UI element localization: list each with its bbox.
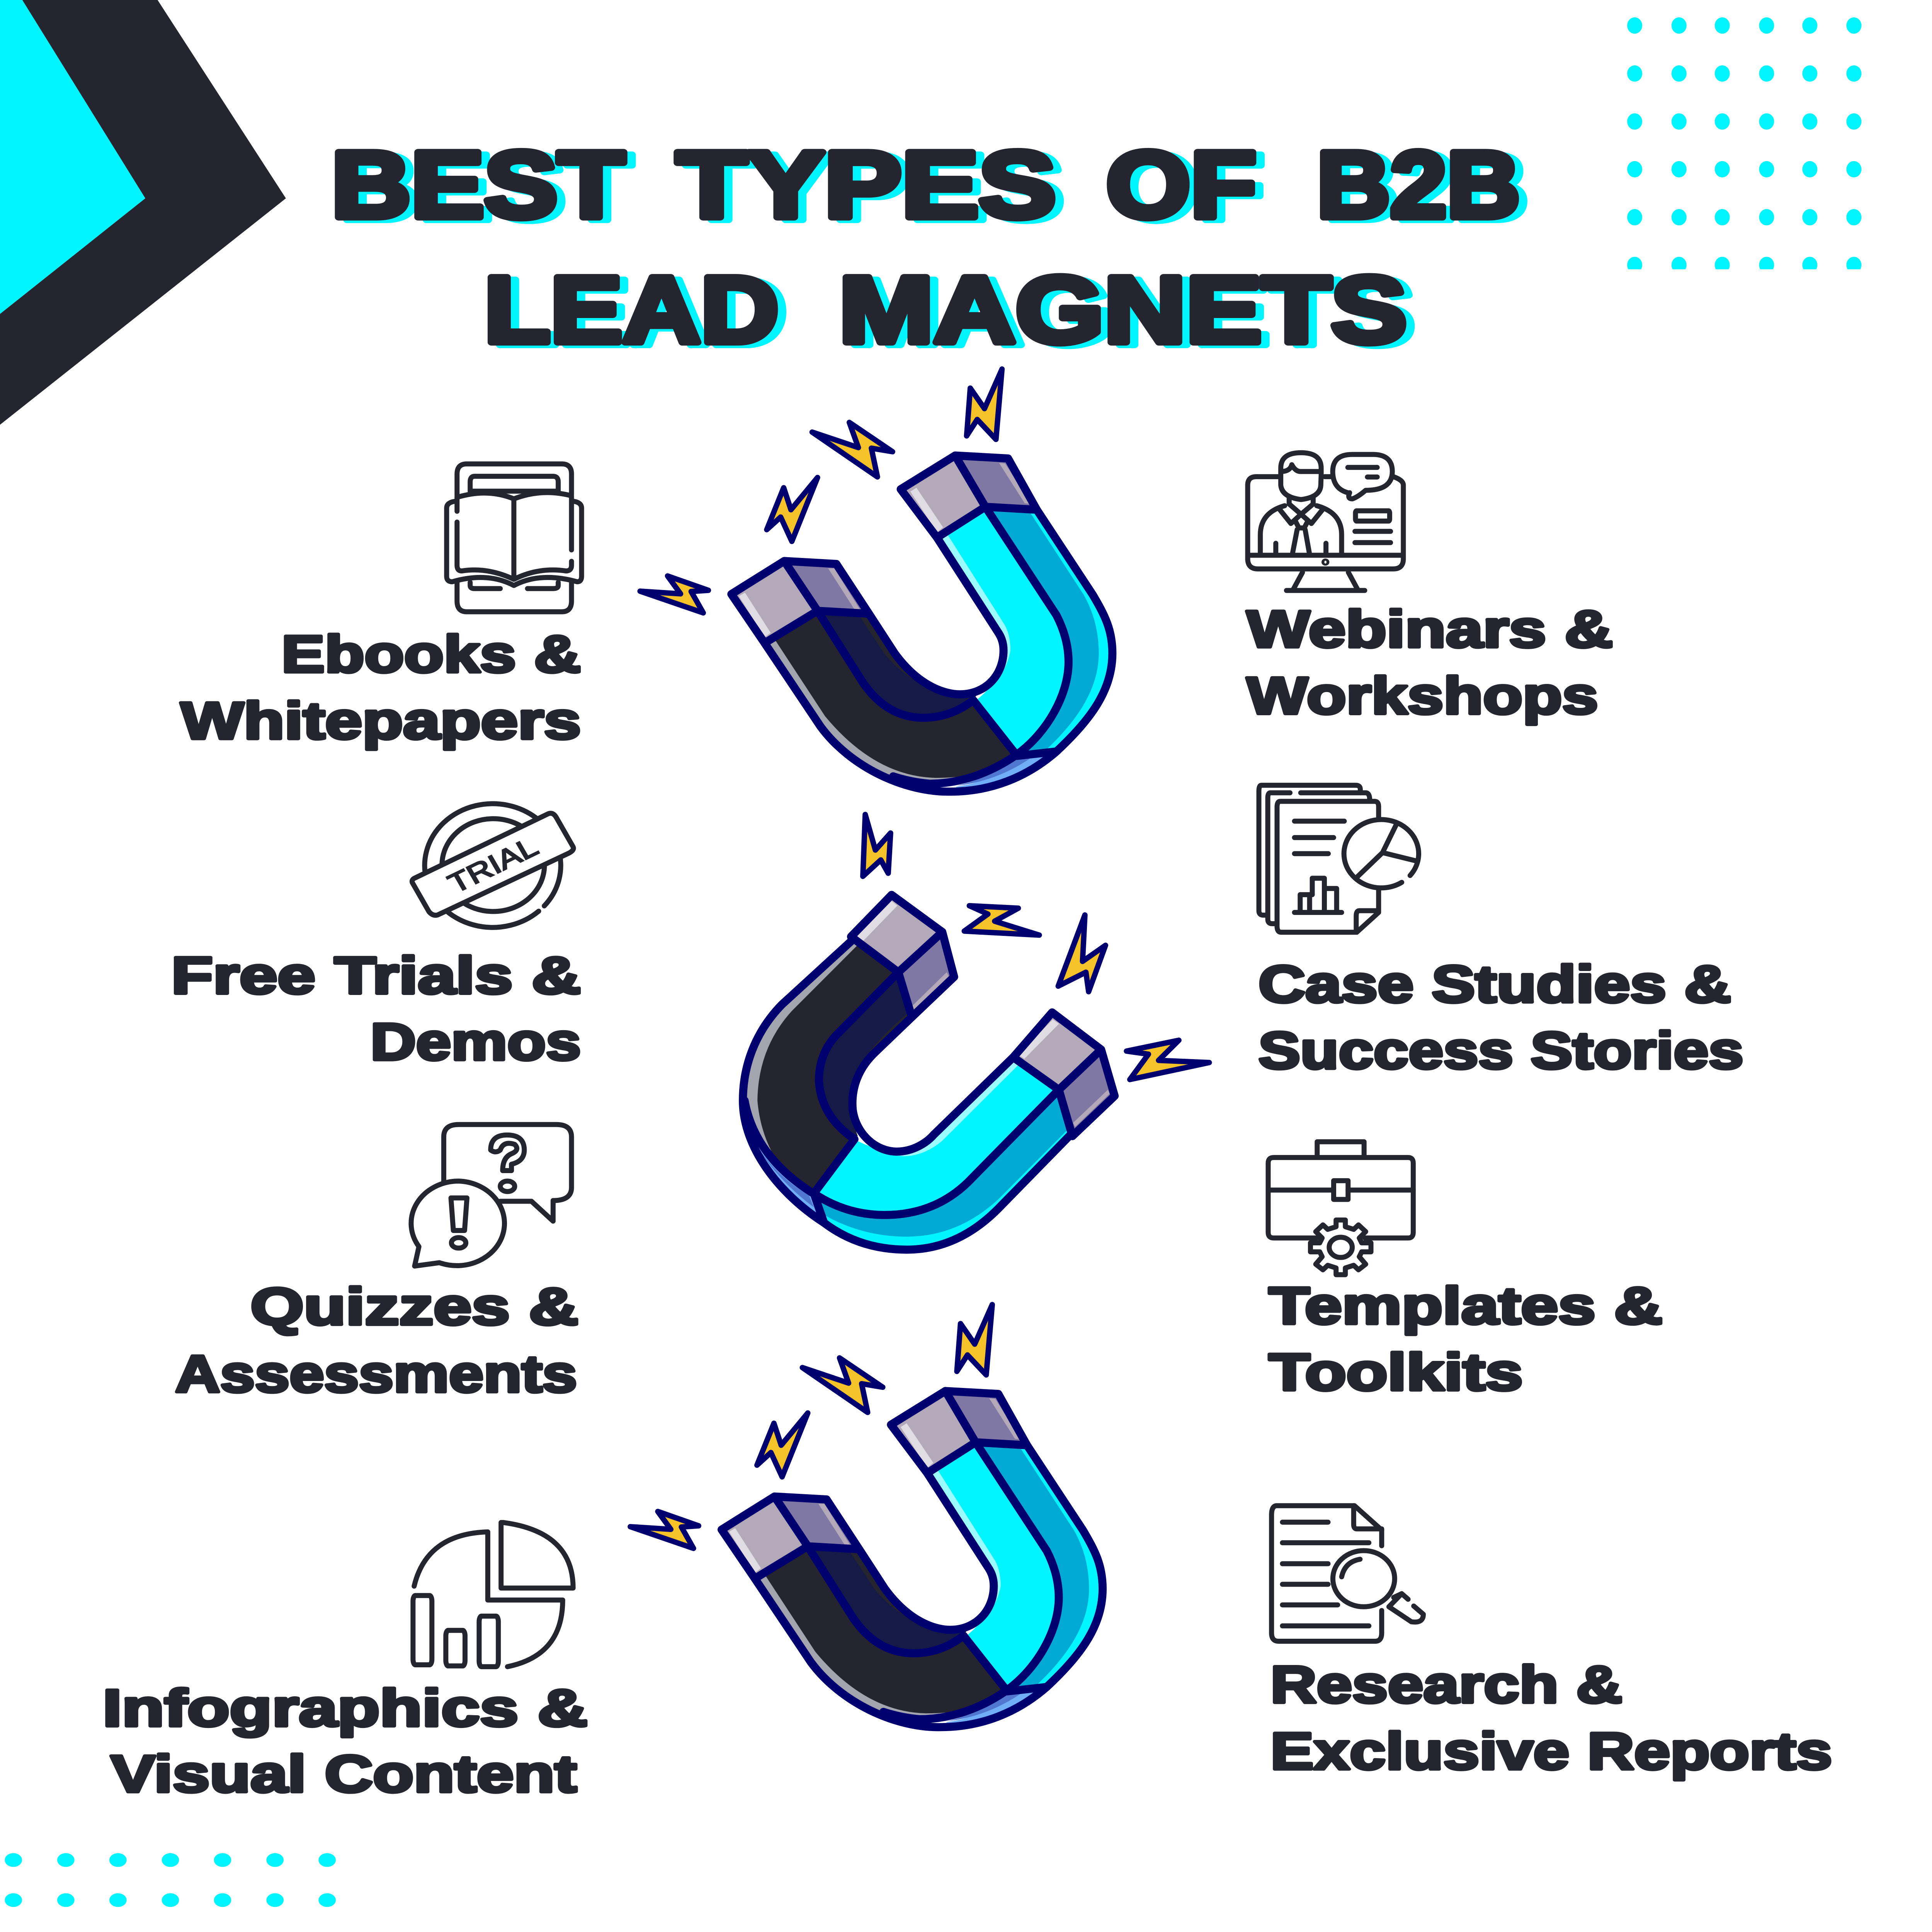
icon: toolkit briefcase with gear <box>1268 1142 1413 1275</box>
title: MAGNETS <box>847 260 1415 365</box>
label: Ebooks & Whitepapers: Ebooks & <box>281 625 581 684</box>
label: Free Trials & Demos: Demos <box>371 1013 581 1071</box>
title: OF <box>1106 132 1257 238</box>
label: Research & Exclusive Reports: Exclusive Reports <box>1270 1722 1832 1781</box>
title: MAGNETS <box>839 257 1407 362</box>
icon: webinar presenter on monitor <box>1248 453 1403 590</box>
bottom left dot grid <box>5 1853 336 1907</box>
label: Quizzes & Assessments: Assessments <box>175 1345 577 1403</box>
label: Quizzes & Assessments: Quizzes & <box>250 1278 578 1336</box>
icon: pie chart and bars <box>413 1522 573 1667</box>
title: BEST <box>332 132 625 238</box>
label: Free Trials & Demos <box>171 947 581 1071</box>
label: Webinars & Workshops: Webinars & <box>1247 600 1613 658</box>
title: TYPES <box>685 134 1064 240</box>
icon: case study documents with pie chart <box>1259 785 1419 932</box>
magnet 1 with sparks <box>640 369 1112 792</box>
label: Case Studies & Success Stories: Case Studies & <box>1259 955 1731 1014</box>
title: OF <box>1114 134 1265 240</box>
title: B2B <box>1325 134 1529 240</box>
label: Templates & Toolkits: Toolkits <box>1269 1343 1523 1401</box>
label: Free Trials & Demos: Free Trials & <box>171 947 581 1005</box>
label: Quizzes & Assessments <box>175 1278 578 1403</box>
label: Templates & Toolkits: Templates & <box>1269 1277 1663 1335</box>
label: Webinars & Workshops <box>1247 600 1613 725</box>
top right dot grid <box>1627 17 1861 273</box>
icon: open book on tablet <box>447 464 582 612</box>
label: Infographics & Visual Content <box>103 1679 588 1803</box>
label: Infographics & Visual Content: Infographics & <box>103 1679 588 1738</box>
label: Research & Exclusive Reports: Research & <box>1270 1656 1622 1714</box>
label: Webinars & Workshops: Workshops <box>1247 667 1598 725</box>
icon: trial stamp: TRIAL <box>443 832 543 899</box>
title <box>332 132 1529 365</box>
title: LEAD <box>493 260 787 365</box>
icon: trial stamp <box>412 804 573 927</box>
label: Case Studies & Success Stories <box>1259 955 1743 1080</box>
label: Research & Exclusive Reports <box>1270 1656 1832 1781</box>
title: LEAD <box>484 257 779 362</box>
label: Infographics & Visual Content: Visual Content <box>111 1745 577 1803</box>
label: Ebooks & Whitepapers <box>181 625 581 750</box>
title: B2B <box>1317 132 1520 238</box>
magnet 2 with sparks <box>743 815 1209 1250</box>
icon: research document with magnifier <box>1272 1506 1423 1641</box>
label: Templates & Toolkits <box>1269 1277 1663 1401</box>
title: BEST <box>340 134 633 240</box>
label: Case Studies & Success Stories: Success Stories <box>1259 1022 1743 1080</box>
label: Ebooks & Whitepapers: Whitepapers <box>181 692 581 750</box>
icon: quiz speech bubbles <box>411 1124 571 1266</box>
corner chevron decoration <box>0 0 286 425</box>
title: TYPES <box>676 132 1056 238</box>
magnet 3 with sparks <box>630 1304 1103 1727</box>
